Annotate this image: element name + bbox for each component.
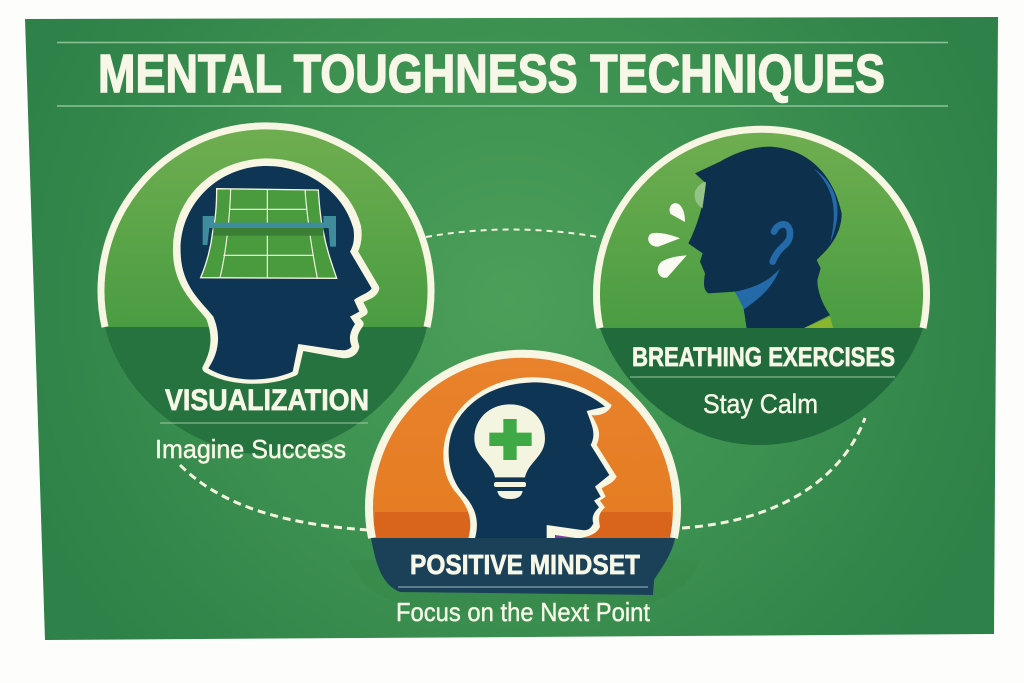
icon: head with light bulb bbox=[443, 377, 617, 538]
dark green band bbox=[600, 328, 923, 445]
panel: visualization bbox=[101, 126, 431, 464]
band shadow bbox=[350, 560, 700, 612]
circle background bbox=[369, 354, 677, 538]
icon: head with tennis court bbox=[177, 163, 375, 379]
label: positive mindset: POSITIVE MINDSET bbox=[410, 549, 640, 580]
panel: positive mindset bbox=[350, 354, 700, 627]
label: visualization: VISUALIZATION bbox=[165, 384, 369, 417]
navy band bbox=[371, 538, 675, 595]
circle ring bbox=[101, 126, 431, 327]
sublabel: focus on the next point: Focus on the Next Point bbox=[396, 597, 651, 627]
icon: breath puffs bbox=[648, 203, 687, 278]
sublabel: imagine success: Imagine Success bbox=[155, 434, 346, 464]
icon: bulb bbox=[474, 404, 545, 499]
circle background bbox=[596, 129, 926, 328]
dashed connectors bbox=[180, 230, 865, 530]
icon: head profile breathing bbox=[648, 147, 842, 328]
circle background bbox=[101, 126, 431, 327]
sublabel: stay calm: Stay Calm bbox=[703, 389, 818, 419]
label: breathing exercises: BREATHING EXERCISES bbox=[632, 342, 895, 372]
tennis court bbox=[201, 189, 337, 278]
title: MENTAL TOUGHNESS TECHNIQUES bbox=[98, 44, 885, 104]
circle ring bbox=[596, 129, 926, 328]
icon: plus sign bbox=[489, 419, 532, 460]
dark green band bbox=[105, 327, 427, 455]
panel: breathing exercises bbox=[596, 129, 926, 445]
circle ring bbox=[369, 354, 677, 538]
